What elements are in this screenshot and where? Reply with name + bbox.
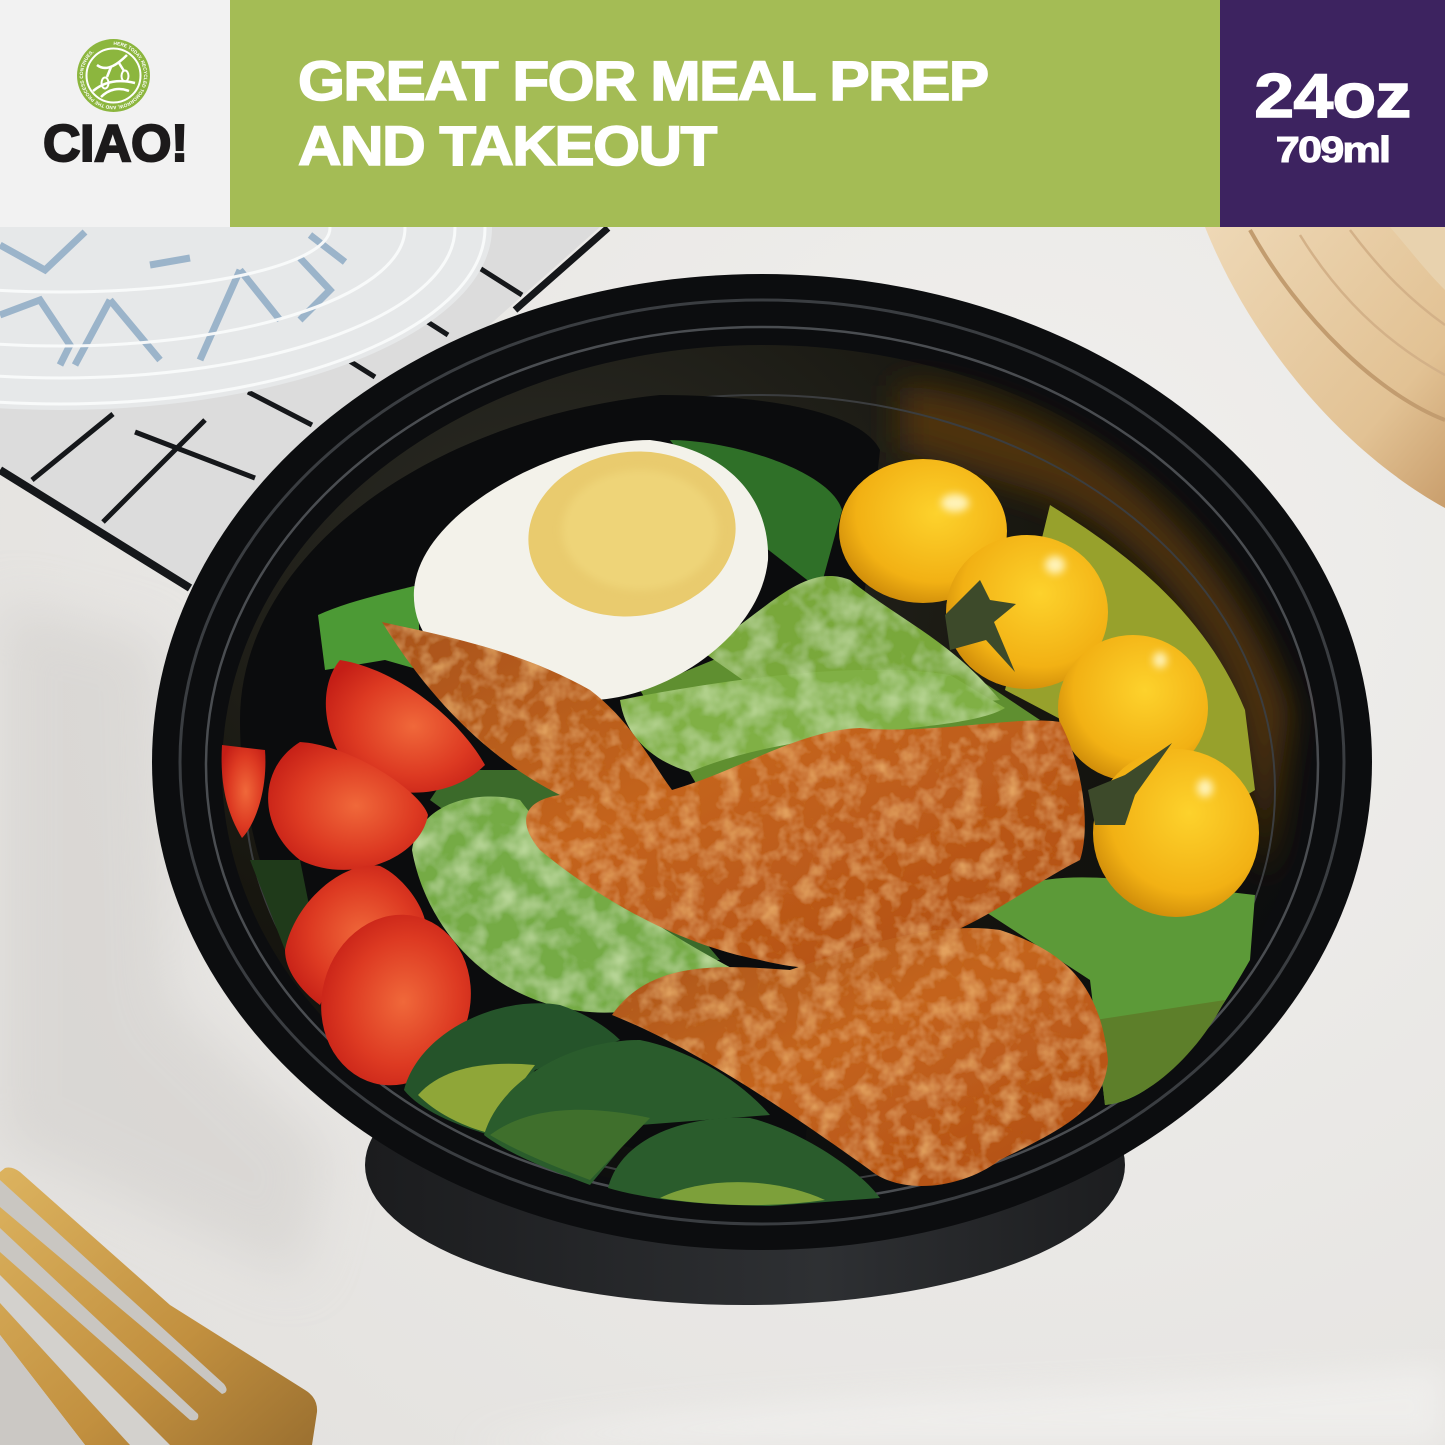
millilitres: 709ml [1276,129,1389,170]
yellow cherry tomatoes [839,459,1259,917]
icon: green olive branch badge: HERE TODAY, RECYCLED TOMORROW, AND THE PROCESS CONTINUES. [80,42,148,110]
gold fork [0,1168,317,1445]
headline: GREAT FOR MEAL PREP [298,49,988,112]
red tomatoes [222,660,490,1102]
cucumber slices [404,1003,880,1206]
area under lid and rack [0,227,600,590]
boiled egg [414,438,768,700]
wire cooling rack [0,228,608,588]
brand name: CIAO! [43,115,188,173]
headline [298,49,988,177]
clear lid [0,46,492,410]
chicken wings [382,622,1108,1186]
ounces: 24oz [1254,62,1411,131]
headline: AND TAKEOUT [298,114,716,177]
headline banner [230,0,1220,227]
olive back leaf [1005,505,1255,830]
black bowl [152,274,1372,1305]
size badge [1220,0,1445,227]
logo panel [0,0,230,227]
dark greens under the food [250,860,320,960]
wood board [1205,227,1445,508]
lettuce [250,440,1255,1105]
